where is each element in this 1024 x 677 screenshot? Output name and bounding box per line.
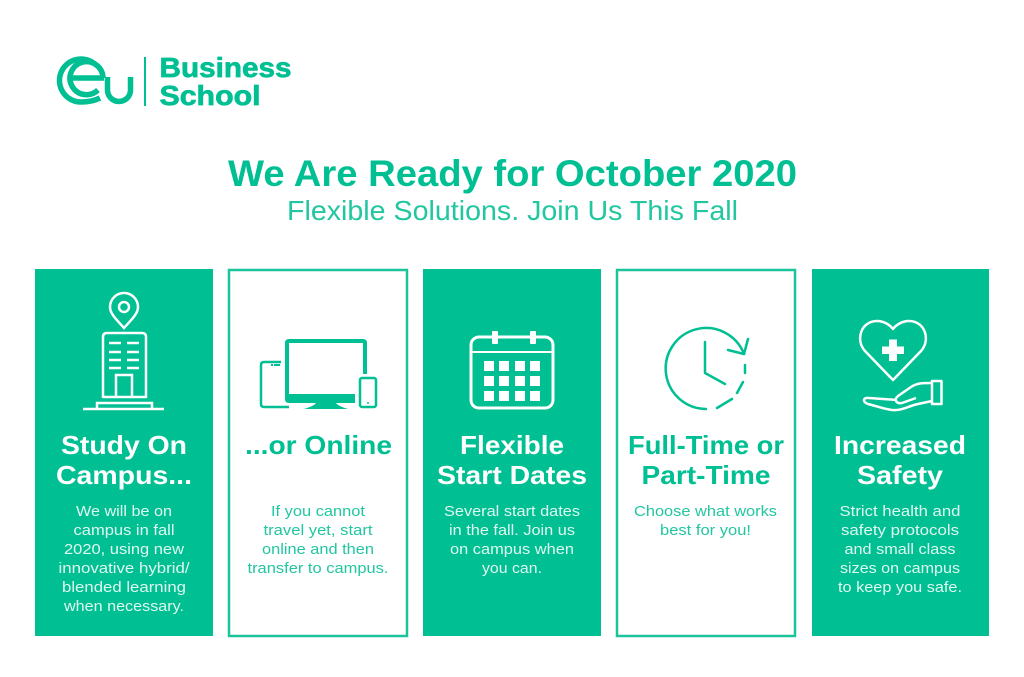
body text: you can.: [482, 560, 542, 577]
body text: and small class: [844, 541, 956, 558]
heading: Increased: [834, 430, 966, 460]
body text: campus in fall: [74, 522, 174, 539]
body text: Strict health and: [840, 503, 960, 520]
body text: Several start dates: [444, 503, 580, 520]
body text: in the fall. Join us: [449, 522, 575, 539]
heading: Study On: [61, 430, 187, 460]
icon: heart on hand: [860, 321, 942, 410]
heading: Full-Time or: [628, 430, 784, 460]
heading: Campus...: [56, 460, 192, 490]
panel: full-time or part-time: [617, 270, 795, 636]
body text: [58, 503, 190, 615]
body text: safety protocols: [841, 522, 959, 539]
body text: [838, 503, 962, 596]
heading: [437, 430, 587, 490]
body text: transfer to campus.: [248, 560, 388, 577]
body text: [444, 503, 580, 577]
heading: Start Dates: [437, 460, 587, 490]
panel: study on campus: [35, 269, 213, 636]
logo wordmark: Business: [160, 52, 292, 83]
heading: [56, 430, 192, 490]
panel: flexible start dates: [423, 269, 601, 636]
body text: travel yet, start: [264, 522, 373, 539]
body text: when necessary.: [63, 598, 184, 615]
icon: devices: [261, 339, 376, 409]
heading: Part-Time: [642, 460, 770, 490]
logo: EU Business School: [59, 52, 291, 111]
body text: sizes on campus: [840, 560, 960, 577]
heading: ...or Online: [245, 430, 392, 460]
body text: We will be on: [76, 503, 172, 520]
heading: [834, 430, 966, 490]
body text: [248, 503, 388, 577]
body text: best for you!: [660, 522, 751, 539]
icon: calendar: [471, 331, 553, 408]
body text: blended learning: [62, 579, 186, 596]
title: We Are Ready for October 2020: [228, 153, 797, 194]
heading: Safety: [857, 460, 944, 490]
subtitle: Flexible Solutions. Join Us This Fall: [287, 195, 738, 226]
logo mark: eu: [59, 59, 130, 102]
body text: [634, 503, 777, 539]
body text: If you cannot: [271, 503, 366, 520]
body text: online and then: [262, 541, 374, 558]
heading: [628, 430, 784, 490]
icon: building with location pin: [83, 293, 164, 409]
body text: to keep you safe.: [838, 579, 962, 596]
logo wordmark: School: [160, 80, 260, 111]
body text: innovative hybrid/: [58, 560, 190, 577]
logo wordmark: [160, 52, 292, 111]
icon: clock with dashed arrow: [666, 328, 748, 409]
body text: Choose what works: [634, 503, 777, 520]
panel: or online: [229, 270, 407, 636]
body text: on campus when: [450, 541, 574, 558]
heading: Flexible: [460, 430, 564, 460]
panel: increased safety: [812, 269, 989, 636]
body text: 2020, using new: [64, 541, 184, 558]
